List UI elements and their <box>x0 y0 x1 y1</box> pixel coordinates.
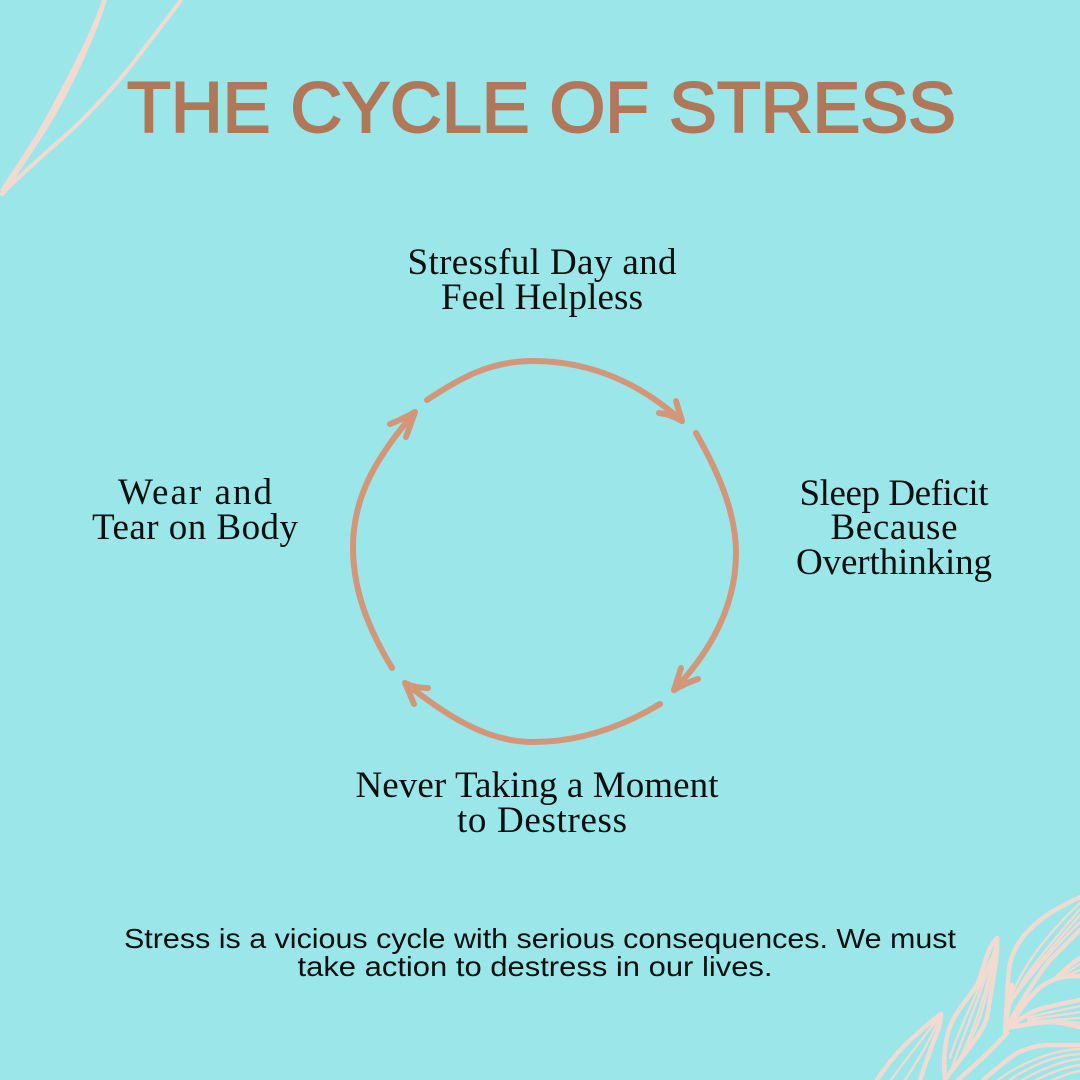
large upper leaf <box>1005 897 1080 1032</box>
label: bottom stage: Never Taking a Moment <box>356 765 719 806</box>
bottom leaf <box>983 1045 1080 1080</box>
label: left stage: Tear on Body <box>92 507 298 548</box>
label: right stage: Overthinking <box>796 542 992 583</box>
middle right leaf <box>1010 958 1080 1027</box>
label: bottom stage: to Destress <box>457 800 627 841</box>
label: right stage: Sleep Deficit <box>800 473 989 514</box>
decoration: top-left leaf lines <box>0 0 181 196</box>
cycle diagram <box>353 361 736 742</box>
lower fan leaf <box>1010 1000 1080 1027</box>
closing statement: take action to destress in our lives. <box>298 951 772 982</box>
arrow: never destress to wear and tear <box>405 683 660 742</box>
label: top stage: Feel Helpless <box>441 277 643 318</box>
decoration: bottom-right leaves <box>877 897 1080 1080</box>
small leaf <box>877 1014 941 1080</box>
tall leaf <box>944 938 997 1080</box>
stem <box>958 1033 1007 1080</box>
label: left stage: Wear and <box>118 472 272 513</box>
title: THE CYCLE OF STRESS <box>127 69 956 148</box>
arrow: wear and tear to stressful day <box>353 412 415 668</box>
label: right stage: Because <box>830 507 958 548</box>
closing statement: Stress is a vicious cycle with serious consequences. We must <box>124 923 956 954</box>
arrow: sleep deficit to never destress <box>674 433 736 690</box>
arrow: stressful day to sleep deficit <box>427 361 682 421</box>
label: top stage: Stressful Day and <box>408 242 677 283</box>
